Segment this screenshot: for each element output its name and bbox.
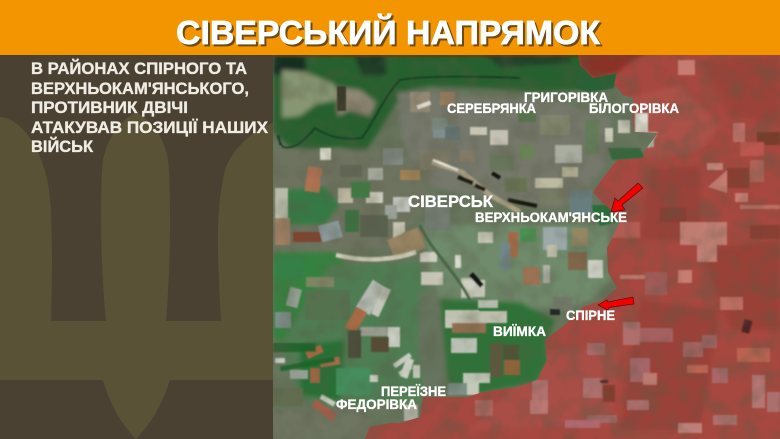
title: СІВЕРСЬКИЙ НАПРЯМОК — [178, 15, 603, 53]
place labels — [336, 89, 679, 412]
text block: description — [31, 59, 268, 156]
label: Федорівка: ФЕДОРІВКА — [336, 397, 417, 412]
text block: description: ПРОТИВНИК ДВІЧІ — [31, 99, 188, 117]
fields — [273, 92, 630, 421]
panel: satellite map — [273, 50, 780, 439]
text block: description: АТАКУВАВ ПОЗИЦІЇ НАШИХ — [31, 119, 268, 137]
text block: description: ВЕРХНЬОКАМ'ЯНСЬКОГО, — [31, 80, 249, 98]
label: Сіверськ: СІВЕРСЬК — [408, 192, 494, 211]
arrow: Верхньокам'янське attack — [611, 183, 643, 212]
roads and village strips — [336, 252, 416, 259]
label: Спірне: СПІРНЕ — [566, 307, 615, 323]
label: Серебрянка: СЕРЕБРЯНКА — [447, 100, 536, 116]
label: Верхньокам'янське: ВЕРХНЬОКАМ'ЯНСЬКЕ — [475, 210, 627, 225]
map texture — [274, 55, 631, 421]
panel: left text background — [0, 55, 273, 439]
arrow: Спірне attack — [598, 297, 634, 310]
label: Григорівка: ГРИГОРІВКА — [524, 89, 608, 105]
label: Виїмка: ВИЇМКА — [493, 323, 546, 339]
title: СІВЕРСЬКИЙ НАПРЯМОК — [176, 13, 601, 51]
label: Переїзне: ПЕРЕЇЗНЕ — [381, 384, 446, 399]
occupied territory overlay — [360, 50, 780, 439]
icon: trident watermark — [0, 112, 273, 439]
text block: description: В РАЙОНАХ СПІРНОГО ТА — [31, 59, 247, 78]
header bar — [0, 0, 780, 55]
label: Білогорівка: БІЛОГОРІВКА — [589, 100, 679, 116]
text block: description: ВІЙСЬК — [31, 137, 94, 156]
